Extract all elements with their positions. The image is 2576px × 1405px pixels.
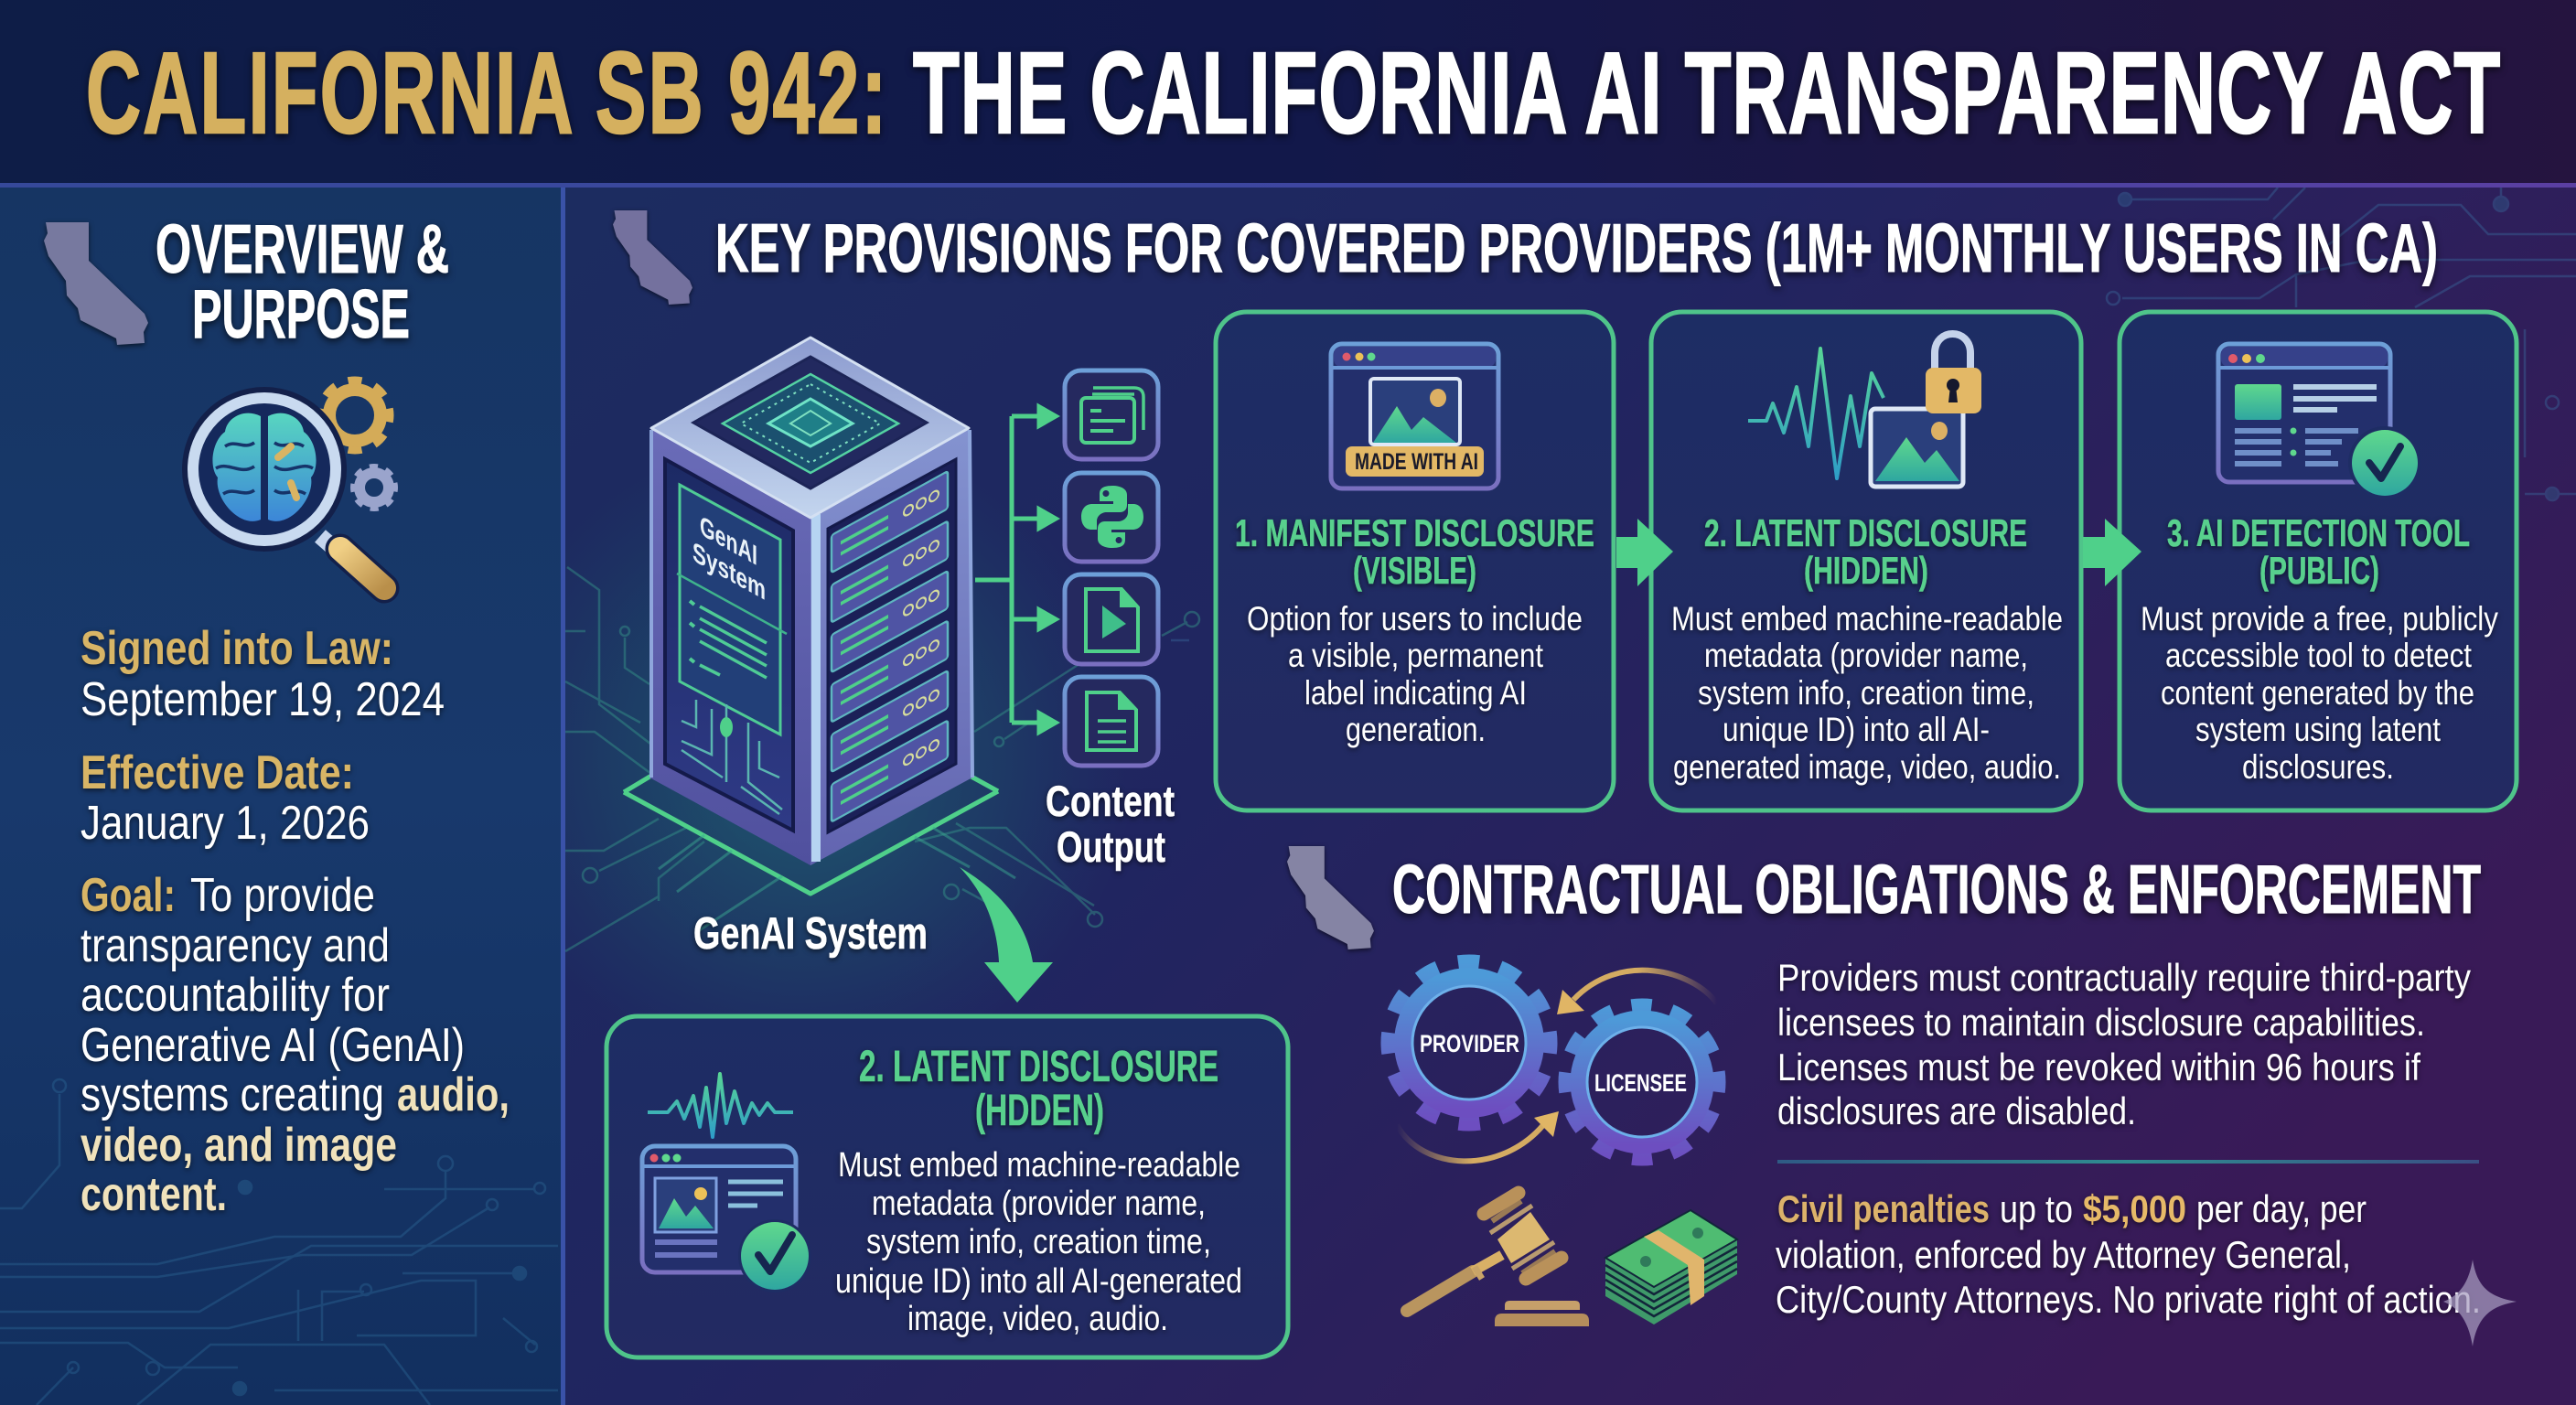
text: latent disclosure body: image, video, audio. <box>907 1300 1168 1338</box>
text: civil penalties: violation, enforced by Attorney General, <box>1776 1233 2351 1276</box>
heading: manifest disclosure: 1. MANIFEST DISCLOSURE <box>1235 511 1594 554</box>
arrow: latent to detection <box>2083 519 2141 586</box>
text: AI detection tool body: content generated by the <box>2161 674 2474 712</box>
text block: key dates and goal <box>80 622 510 1221</box>
text: AI detection tool body: accessible tool to detect <box>2165 637 2473 674</box>
text: civil penalties: per day, per <box>2196 1187 2367 1230</box>
panel: 1 manifest disclosure <box>1216 312 1614 810</box>
text: manifest disclosure body: Option for users to include <box>1247 600 1583 638</box>
label on server face: GenAI <box>700 509 757 572</box>
icon: document stack output <box>1065 370 1158 459</box>
heading: overview and purpose: OVERVIEW & <box>156 210 449 287</box>
text block: key dates and goal: Generative AI (GenAI) <box>80 1019 465 1072</box>
panel: latent disclosure callout <box>606 1016 1288 1357</box>
text: contractual obligations: Providers must contractually require third-party <box>1777 956 2471 999</box>
left face <box>649 428 810 865</box>
text block: key dates and goal: transparency and <box>80 919 390 972</box>
text: contractual obligations: Licenses must be revoked within 96 hours if <box>1777 1046 2420 1089</box>
heading: AI detection tool: (PUBLIC) <box>2259 549 2379 592</box>
text block: key dates and goal: Signed into Law: <box>80 622 393 675</box>
arrow: manifest to latent <box>1616 519 1673 586</box>
title text: CALIFORNIA SB 942: <box>86 28 886 157</box>
heading: latent disclosure: 2. LATENT DISCLOSURE <box>859 1043 1218 1091</box>
icon: provider and licensee gears: PROVIDER <box>1420 1030 1519 1057</box>
text: latent disclosure body: system info, creation time, <box>866 1223 1211 1261</box>
text: manifest disclosure body: a visible, permanent <box>1288 637 1544 674</box>
icon: California outline, enforcement <box>1287 846 1374 949</box>
icon: python output <box>1065 473 1158 562</box>
text block: key dates and goal: To provide <box>190 869 375 922</box>
icon: text file output <box>1065 677 1158 766</box>
text block: key dates and goal: content. <box>80 1168 227 1221</box>
text: AI detection tool body <box>2141 600 2498 786</box>
icon: California outline, provisions <box>613 210 692 305</box>
heading: latent disclosure: (HDDEN) <box>975 1087 1104 1135</box>
icon: waveform and verified window <box>642 1074 811 1292</box>
text: civil penalties: Civil penalties <box>1777 1187 1990 1230</box>
label on server face: System <box>692 535 766 606</box>
icon: stack of money <box>1605 1210 1737 1325</box>
text block: key dates and goal: systems creating <box>80 1068 384 1121</box>
text: latent disclosure hidden body: metadata (provider name, <box>1704 637 2028 674</box>
icon: verified detection window <box>2218 344 2421 499</box>
text: latent disclosure body <box>835 1146 1242 1338</box>
text: latent disclosure body: unique ID) into all AI-generated <box>835 1262 1242 1301</box>
heading: latent disclosure hidden <box>1704 511 2027 592</box>
title text: THE CALIFORNIA AI TRANSPARENCY ACT <box>913 28 2500 157</box>
text: contractual obligations: disclosures are disabled. <box>1777 1089 2136 1132</box>
icon: provider and licensee gears: LICENSEE <box>1594 1069 1687 1097</box>
icon: made with AI window: MADE WITH AI <box>1355 449 1478 475</box>
diagram: GenAI system tower <box>624 338 1015 933</box>
text: latent disclosure hidden body: system info, creation time, <box>1698 674 2034 712</box>
text: contractual obligations <box>1777 956 2471 1132</box>
icon: waveform, image and padlock <box>1748 334 1981 487</box>
label: content output: Content <box>1046 777 1175 825</box>
text: civil penalties: $5,000 <box>2083 1187 2186 1230</box>
text: latent disclosure body: metadata (provider name, <box>872 1185 1206 1223</box>
text: latent disclosure hidden body: Must embed machine-readable <box>1671 600 2063 638</box>
text block: key dates and goal: audio, <box>397 1068 510 1121</box>
heading: manifest disclosure: (VISIBLE) <box>1353 549 1476 592</box>
text: AI detection tool body: system using latent <box>2195 711 2442 748</box>
text: civil penalties <box>1776 1187 2481 1321</box>
text block: key dates and goal: video, and image <box>80 1119 397 1172</box>
label on server face <box>692 505 766 606</box>
text: latent disclosure body: Must embed machine-readable <box>838 1146 1240 1185</box>
text: contractual obligations: licensees to maintain disclosure capabilities. <box>1777 1001 2425 1044</box>
panel: 3 AI detection tool <box>2120 312 2517 810</box>
right face <box>810 428 972 865</box>
text: manifest disclosure body <box>1247 600 1583 748</box>
icon: sparkle <box>2443 1260 2517 1346</box>
background: main provisions panel <box>565 187 2576 1405</box>
text block: key dates and goal: Goal: <box>80 869 176 922</box>
text: AI detection tool body: disclosures. <box>2242 748 2394 786</box>
icon: provider and licensee gears <box>1389 962 1719 1161</box>
label: GenAI system: GenAI System <box>693 909 928 959</box>
background: overview panel <box>0 187 561 1405</box>
text block: key dates and goal: September 19, 2024 <box>80 673 445 726</box>
label: content output: Output <box>1057 822 1165 871</box>
heading: latent disclosure hidden: 2. LATENT DISCLOSURE <box>1704 511 2027 554</box>
icon: made with AI window <box>1331 344 1498 488</box>
arrows: tower to content outputs <box>975 405 1057 734</box>
text: civil penalties: up to <box>2000 1187 2073 1230</box>
label: content output <box>1046 777 1175 871</box>
text: manifest disclosure body: generation. <box>1346 711 1486 748</box>
heading: latent disclosure hidden: (HIDDEN) <box>1804 549 1928 592</box>
arrow: tower to latent disclosure <box>960 867 1053 1003</box>
text: AI detection tool body: Must provide a free, publicly <box>2141 600 2498 638</box>
heading: overview and purpose: PURPOSE <box>192 275 410 352</box>
top <box>651 338 969 518</box>
heading: latent disclosure <box>859 1043 1218 1135</box>
left screen <box>665 459 793 831</box>
panel: 2 latent disclosure <box>1651 312 2081 810</box>
text block: key dates and goal: accountability for <box>80 969 390 1022</box>
heading: overview and purpose <box>156 210 449 352</box>
icon: magnifier over brain with gears <box>182 381 395 588</box>
title text <box>86 28 2500 157</box>
text: latent disclosure hidden body: unique ID) into all AI- <box>1723 711 1990 748</box>
text: latent disclosure hidden body <box>1671 600 2063 786</box>
heading: AI detection tool <box>2167 511 2470 592</box>
icon: video file output <box>1065 574 1158 664</box>
text: latent disclosure hidden body: generated image, video, audio. <box>1673 748 2061 786</box>
icon: gavel <box>1407 1193 1589 1326</box>
panel: overview and purpose <box>44 210 510 1221</box>
text: manifest disclosure body: label indicating AI <box>1304 674 1527 712</box>
title banner <box>0 0 2576 188</box>
platform <box>624 791 998 894</box>
text: civil penalties: City/County Attorneys. No private right of action. <box>1776 1278 2481 1321</box>
right server units <box>828 459 956 832</box>
text block: key dates and goal: January 1, 2026 <box>80 797 370 850</box>
text block: key dates and goal: Effective Date: <box>80 746 354 799</box>
icon: California outline <box>44 222 148 345</box>
heading: manifest disclosure <box>1235 511 1594 592</box>
